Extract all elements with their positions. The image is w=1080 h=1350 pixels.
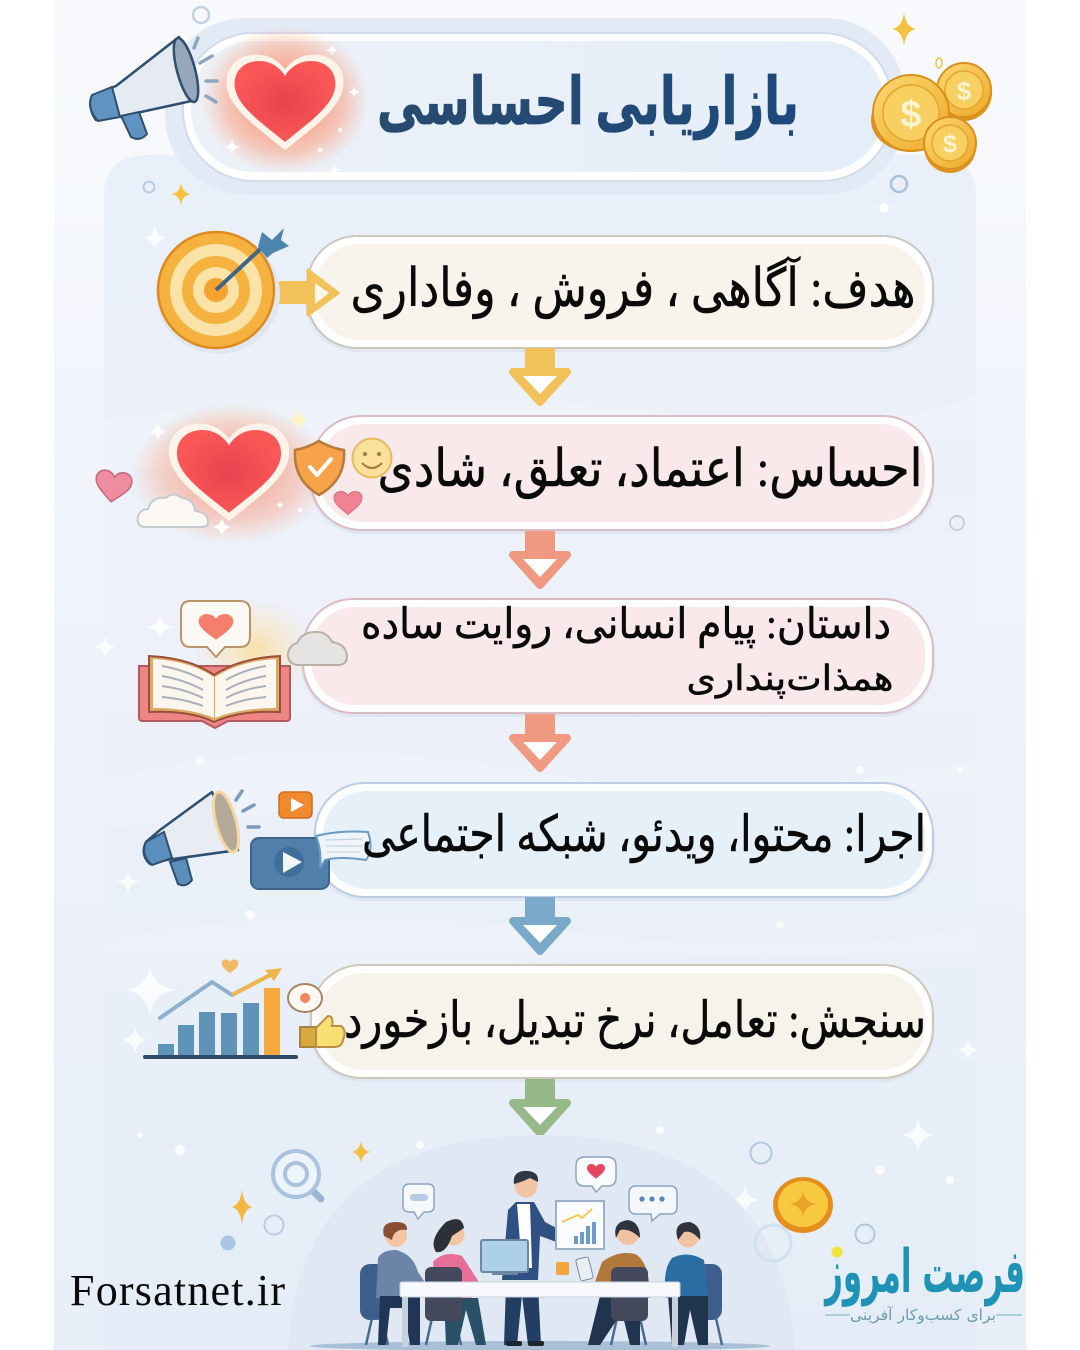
header title: بازاریابی احساسی — [377, 66, 799, 140]
icon: story cloud — [288, 632, 347, 665]
meeting table — [400, 1282, 680, 1347]
arrow: salmon two — [513, 714, 567, 768]
icon: coins: $ — [900, 94, 922, 136]
panel: goal row — [156, 228, 935, 354]
decorative sparkles and circles — [220, 1141, 874, 1261]
icon: monitor — [481, 1240, 528, 1275]
panel: emotion row — [93, 403, 935, 543]
chair legs — [366, 1318, 722, 1345]
person: left two — [433, 1219, 486, 1345]
icon: header megaphone — [90, 36, 217, 139]
icon: presentation board — [556, 1201, 604, 1249]
chair back left — [425, 1267, 462, 1321]
icon: cup — [556, 1262, 569, 1275]
icon: video tile — [251, 838, 329, 889]
icon: connector arrow — [272, 270, 338, 315]
header banner — [165, 18, 905, 195]
person: presenter — [502, 1171, 566, 1346]
icon: small heart — [334, 492, 362, 514]
icon: thumbs up — [300, 1016, 345, 1047]
icon: coins: $ — [943, 130, 957, 158]
arrow: salmon — [513, 531, 567, 585]
icon: coins — [871, 63, 992, 173]
arrow: blue — [513, 897, 567, 951]
person: left one — [376, 1222, 426, 1345]
icon: shield — [295, 441, 344, 495]
icon: gold coin — [773, 1177, 833, 1233]
chair back right — [611, 1267, 648, 1321]
text: story line two: همذات‌پنداری — [686, 659, 894, 699]
icon: emotion heart — [132, 403, 332, 543]
icon: paper note — [316, 832, 371, 868]
icon: magnifier — [273, 1151, 321, 1199]
chairs right — [696, 1264, 722, 1320]
icon: execution megaphone — [144, 789, 259, 885]
text: goal: هدف: آگاهی ، فروش ، وفاداری — [350, 256, 916, 319]
logo: برای کسب‌وکار آفرینی — [850, 1306, 996, 1324]
icon: bubble outline left — [403, 1184, 434, 1219]
arrow: yellow — [513, 348, 567, 402]
panel: story row — [139, 599, 935, 728]
header heart — [201, 26, 369, 176]
icon: speech bubble with heart — [181, 601, 250, 657]
person: right two — [665, 1222, 708, 1345]
person: right one — [576, 1220, 650, 1345]
arrow: green — [513, 1079, 567, 1133]
chairs left — [360, 1264, 386, 1320]
icon: orange play tile — [279, 792, 312, 818]
text: measurement: سنجش: تعامل، نرخ تبدیل، بازخورد — [344, 992, 926, 1049]
icon: bar chart — [143, 960, 298, 1059]
icon: comment bubble — [288, 984, 322, 1012]
panel: measurement row — [143, 960, 935, 1082]
icon: bubble dots — [629, 1186, 677, 1221]
icon: smiley — [352, 438, 392, 478]
website label: Forsatnet.ir — [70, 1266, 285, 1315]
text: execution: اجرا: محتوا، ویدئو، شبکه اجتماعی — [362, 806, 926, 864]
icon: coins: $ — [957, 76, 972, 106]
logo — [823, 1237, 1025, 1324]
icon: pink heart — [93, 469, 133, 504]
icon: target with arrow — [156, 228, 289, 354]
text: emotion: احساس: اعتماد، تعلق، شادی — [378, 441, 922, 499]
team meeting illustration — [288, 1135, 795, 1350]
icon: open book — [139, 600, 315, 728]
panel: execution row — [144, 783, 935, 901]
icon: cloud — [138, 494, 208, 527]
icon: bubble heart — [576, 1157, 616, 1192]
text: story line one: داستان: پیام انسانی، روایت ساده — [361, 602, 891, 649]
